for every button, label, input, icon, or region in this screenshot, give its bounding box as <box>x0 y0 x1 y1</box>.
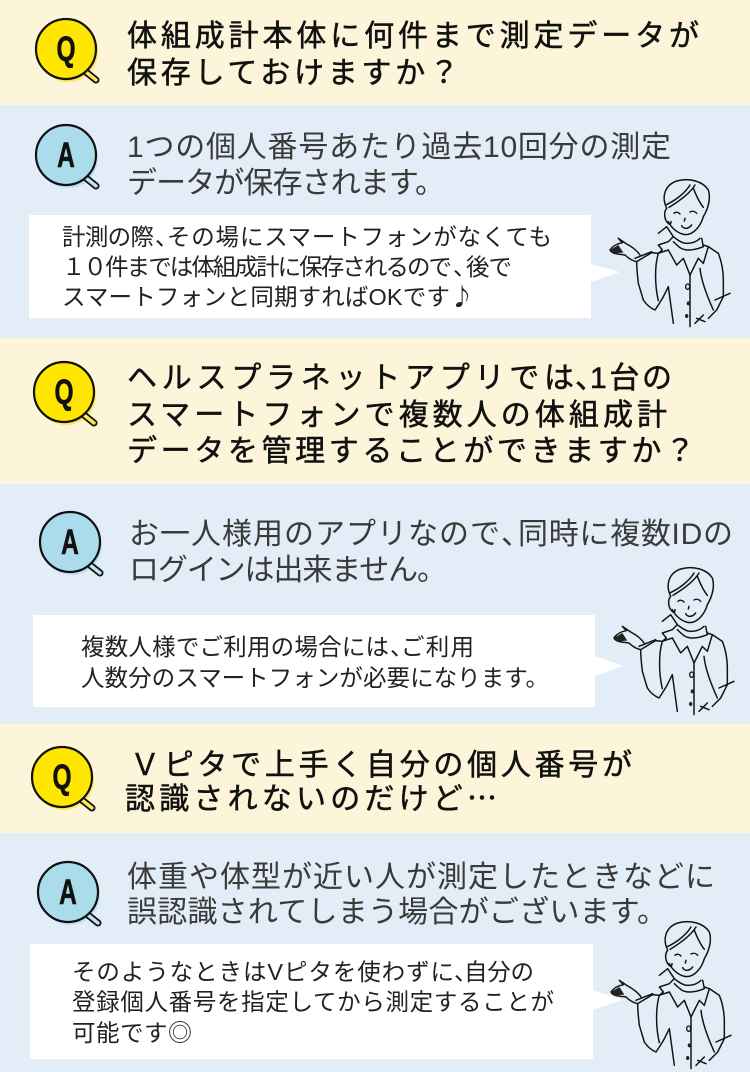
answer 2 text <box>129 518 733 587</box>
icon: A badge 1 <box>36 125 98 188</box>
speech bubble 1 text: 後で <box>466 254 512 280</box>
icon: Q badge 2: Q <box>54 374 74 412</box>
answer 1 text: データが保存されます。 <box>127 167 445 200</box>
icon: Q badge 1: Q <box>56 31 76 69</box>
answer 3 text <box>127 861 715 929</box>
question 3 text <box>125 749 632 818</box>
answer 1 text: 1つの個人番号あたり過去10回分の測定 <box>127 131 671 164</box>
band: question 1 background <box>0 0 750 105</box>
answer 2 text: 同時に複数IDの <box>518 518 733 551</box>
speech bubble 3 text: そのようなときはVピタを使わずに <box>72 959 454 985</box>
speech bubble 1 text: １０件までは体組成計に保存されるので <box>62 254 452 280</box>
answer 3 text: 誤認識されてしまう場合がございます。 <box>127 896 667 929</box>
question 3 text: 認識されないのだけど… <box>125 774 497 818</box>
speech bubble 2 text: 複数人様でご利用の場合には <box>81 634 389 660</box>
speech bubble 2 <box>33 615 623 707</box>
speech bubble 1 text: 計測の際 <box>62 224 154 250</box>
answer 1 text <box>127 131 671 200</box>
speech bubble 1 text <box>62 224 552 312</box>
answer 2 text: 、 <box>501 518 531 551</box>
question 2 text: データを管理することができますか？ <box>127 435 695 468</box>
icon: Q badge 2 <box>34 362 96 425</box>
speech bubble 1 text: その場にスマートフォンがなくても <box>167 224 552 250</box>
speech bubble 2 text: ご利用 <box>401 634 474 660</box>
speech bubble 3 <box>30 944 622 1059</box>
band: answer 1 background <box>0 105 750 338</box>
speech bubble 2 text: 人数分のスマートフォンが必要になります。 <box>81 665 549 691</box>
speech bubble 3 text: 自分の <box>464 959 534 985</box>
question 2 text: スマートフォンで複数人の体組成計 <box>127 399 667 432</box>
speech bubble 2 text: 、 <box>390 634 414 660</box>
illustration: woman gesturing 2 <box>614 568 734 715</box>
answer 2 text: お一人様用のアプリなので <box>129 518 500 551</box>
speech bubble 1 text: 、 <box>155 224 178 250</box>
illustration: woman gesturing 1 <box>610 180 730 327</box>
icon: Q badge 1 <box>36 19 98 82</box>
speech bubble 3 text <box>72 959 554 1048</box>
band: answer 2 background <box>0 484 750 724</box>
question 1 text: 体組成計本体に何件まで測定データが <box>127 20 699 53</box>
question 1 text: 保存しておけますか？ <box>127 57 459 90</box>
speech bubble 3 text: 、 <box>454 959 478 985</box>
speech bubble 1 <box>29 215 620 318</box>
answer 3 text: 体重や体型が近い人が測定したときなどに <box>127 861 715 894</box>
band: question 2 background <box>0 338 750 484</box>
icon: Q badge 3: Q <box>52 759 72 797</box>
speech bubble 3 text: 可能です◎ <box>72 1013 192 1048</box>
icon: A badge 1: A <box>57 137 75 175</box>
band: answer 3 background <box>0 833 750 1072</box>
icon: Q badge 3 <box>32 747 94 810</box>
icon: A badge 2: A <box>61 524 79 562</box>
illustration: woman gesturing 3 <box>611 922 731 1069</box>
icon: A badge 2 <box>40 512 102 575</box>
question 2 text: 1台の <box>590 362 672 395</box>
question 2 text <box>127 362 695 468</box>
question 2 text: 、 <box>575 362 605 395</box>
icon: A badge 3: A <box>59 874 77 912</box>
question 2 text: ヘルスプラネットアプリでは <box>127 362 574 395</box>
speech bubble 1 text: スマートフォンと同期すればOKです♪ <box>62 277 474 312</box>
band: question 3 background <box>0 724 750 833</box>
question 3 text: Ｖピタで上手く自分の個人番号が <box>130 749 632 782</box>
speech bubble 2 text <box>81 634 549 691</box>
answer 2 text: ログインは出来ません。 <box>129 554 447 587</box>
question 1 text <box>127 20 699 90</box>
speech bubble 1 text: 、 <box>453 254 476 280</box>
speech bubble 3 text: 登録個人番号を指定してから測定することが <box>72 989 554 1015</box>
icon: A badge 3 <box>38 862 100 925</box>
